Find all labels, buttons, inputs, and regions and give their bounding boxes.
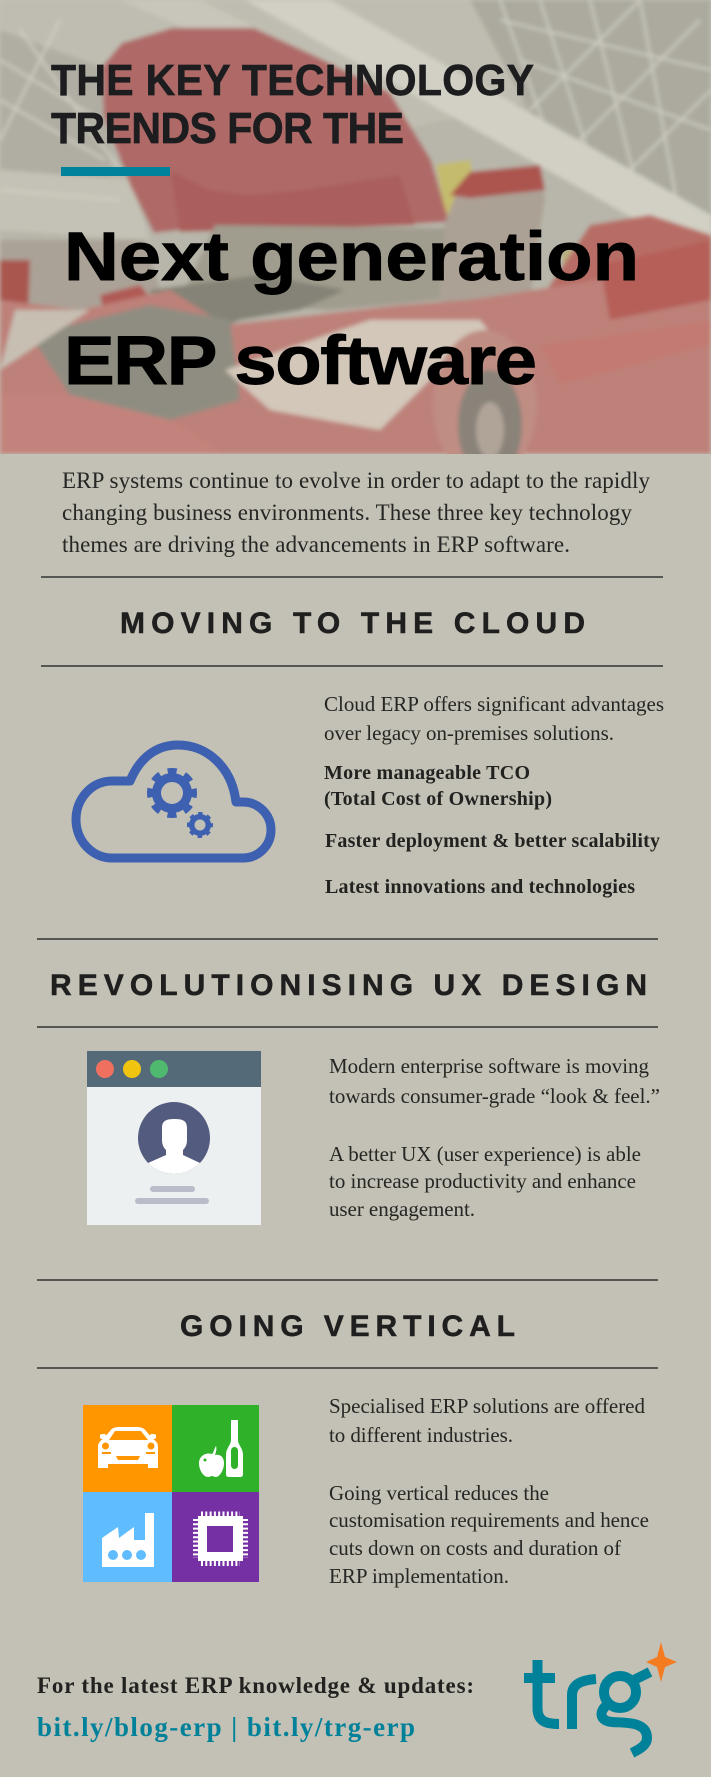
cloud section text: Latest innovations and technologies: [325, 876, 635, 898]
subtitle: the key technology trends: [51, 56, 534, 152]
main title: [64, 219, 639, 399]
main title: Next generation: [64, 219, 639, 295]
cloud section text: Faster deployment & better scalability: [325, 830, 660, 852]
teal accent bar: [61, 167, 170, 176]
heading: moving to the cloud: MOVING TO THE CLOUD: [120, 607, 585, 640]
footer call to action: For the latest ERP knowledge & updates:: [37, 1673, 474, 1698]
icon: microchip tile: [172, 1492, 259, 1582]
icon: food and drink tile: [172, 1405, 259, 1492]
cloud section text: over legacy on-premises solutions.: [324, 721, 614, 745]
ux section text: Modern enterprise software is moving: [329, 1054, 650, 1078]
footer call to action: bit.ly/blog-erp | bit.ly/trg-erp: [37, 1712, 415, 1742]
logo: trg: [524, 1642, 677, 1753]
icon: factory tile: [83, 1492, 172, 1582]
vertical section text: ERP implementation.: [329, 1564, 509, 1588]
footer call to action: [37, 1673, 474, 1742]
ux section text: A better UX (user experience) is able: [329, 1142, 641, 1166]
icon: car tile: [83, 1405, 172, 1492]
subtitle: the key technology trends: TRENDS FOR THE: [51, 104, 404, 152]
ux section text: to increase productivity and enhance: [329, 1169, 636, 1193]
ux section text: user engagement.: [329, 1197, 475, 1221]
heading: going vertical: GOING VERTICAL: [180, 1310, 515, 1343]
vertical section text: to different industries.: [329, 1423, 513, 1447]
icon: browser window with user profile: [87, 1051, 261, 1225]
main title: ERP software: [64, 323, 537, 399]
ux section text: towards consumer-grade “look & feel.”: [329, 1084, 660, 1108]
cloud section text: Cloud ERP offers significant advantages: [324, 692, 664, 716]
cloud section text: (Total Cost of Ownership): [324, 788, 552, 810]
vertical section text: Specialised ERP solutions are offered: [329, 1394, 646, 1418]
ux section text: [329, 1054, 660, 1221]
intro paragraph: changing business environments. These three key technology: [62, 500, 632, 525]
intro paragraph: [62, 468, 650, 557]
vertical section text: customisation requirements and hence: [329, 1508, 649, 1532]
subtitle: the key technology trends: THE KEY TECHNOLOGY: [51, 56, 534, 104]
icon: cloud with gears: [76, 745, 271, 858]
cloud section text: [324, 692, 664, 898]
icon grid: industries: [83, 1405, 259, 1582]
vertical section text: cuts down on costs and duration of: [329, 1536, 621, 1560]
intro paragraph: ERP systems continue to evolve in order to adapt to the rapidly: [62, 468, 650, 493]
vertical section text: [329, 1394, 649, 1588]
intro paragraph: themes are driving the advancements in ERP software.: [62, 532, 570, 557]
hero photo: red car on factory line: [0, 0, 711, 480]
vertical section text: Going vertical reduces the: [329, 1481, 549, 1505]
heading: revolutionising ux design: REVOLUTIONISING UX DESIGN: [50, 969, 647, 1002]
cloud section text: More manageable TCO: [324, 762, 530, 784]
